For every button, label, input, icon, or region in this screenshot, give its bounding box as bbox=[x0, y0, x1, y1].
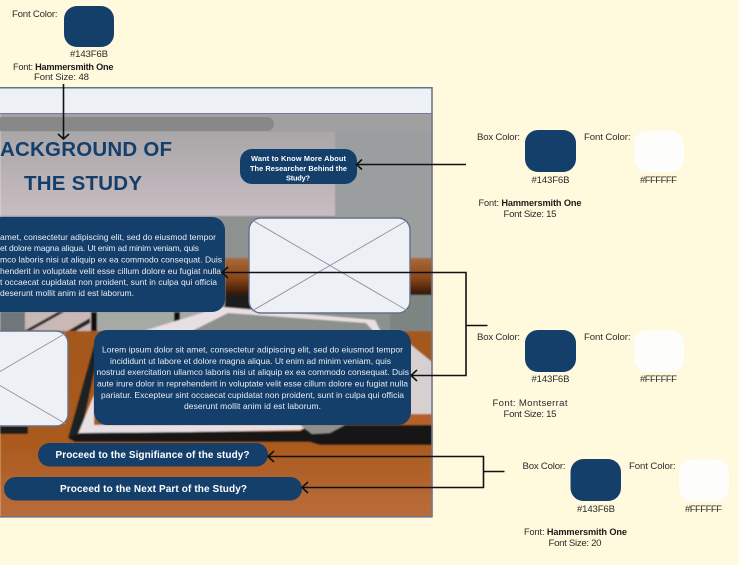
button: researcher bbox=[240, 149, 357, 184]
panel: page mockup bbox=[0, 88, 432, 517]
spec: proceed buttons: Font: Hammersmith One bbox=[524, 527, 627, 537]
spec: title font: #143F6B bbox=[70, 49, 108, 60]
browser top bar bbox=[0, 88, 432, 113]
title: THE STUDY bbox=[24, 172, 142, 195]
frame border bbox=[0, 88, 432, 517]
text box 2: deserunt mollit anim id est laborum. bbox=[184, 401, 321, 411]
swatch: box color bbox=[570, 459, 621, 501]
spec: body text boxes: #FFFFFF bbox=[640, 374, 677, 385]
spec: title font bbox=[12, 6, 114, 83]
spec: researcher button: Font: Hammersmith One bbox=[478, 198, 582, 208]
text box 1: mco laboris nisi ut aliquip ex ea commodo consequat. Duis bbox=[0, 254, 222, 264]
text box 1: et dolore magna aliqua. Ut enim ad minim veniam, quis bbox=[0, 243, 199, 253]
spec: researcher button: Box Color: bbox=[477, 132, 520, 143]
address bar bbox=[0, 117, 274, 131]
spec: proceed buttons: #FFFFFF bbox=[685, 504, 722, 515]
spec: title font: Font Size: 48 bbox=[34, 72, 89, 83]
background photo of desk bbox=[0, 113, 432, 517]
text box 1 bbox=[0, 217, 225, 312]
spec: researcher button: Font Color: bbox=[584, 132, 630, 143]
spec: proceed buttons: Font Size: 20 bbox=[548, 538, 602, 549]
spec: researcher button: #FFFFFF bbox=[640, 175, 677, 186]
spec: researcher button bbox=[477, 130, 684, 220]
spec: title font: Font: Hammersmith One bbox=[13, 62, 114, 72]
text box 1: t occaecat cupidatat non proident, sunt in culpa qui officia bbox=[0, 277, 217, 287]
spec: body text boxes: Font Color: bbox=[584, 332, 630, 343]
title: ACKGROUND OF bbox=[0, 138, 172, 161]
text box 2: aute irure dolor in reprehenderit in voluptate velit esse cillum dolore eu fugiat nulla bbox=[97, 378, 408, 388]
spec: body text boxes: Font Size: 15 bbox=[504, 409, 556, 420]
text box 1: deserunt mollit anim id est laborum. bbox=[0, 288, 134, 298]
text box 2 bbox=[94, 330, 411, 425]
spec: title font: Font Color: bbox=[12, 9, 58, 20]
text box 1: amet, consectetur adipiscing elit, sed do eiusmod tempor bbox=[0, 232, 216, 242]
text box 2: nostrud exercitation ullamco laboris nisi ut aliquip ex ea commodo consequat. Duis bbox=[96, 367, 409, 377]
button: researcher: The Researcher Behind the bbox=[250, 164, 347, 173]
spec: proceed buttons: Font Color: bbox=[629, 461, 676, 472]
spec: researcher button: #143F6B bbox=[532, 175, 570, 186]
spec: researcher button: Font Size: 15 bbox=[504, 209, 556, 220]
arrow bracket: text boxes annotation bbox=[222, 267, 488, 381]
image placeholder 1 bbox=[249, 218, 410, 313]
swatch: box color bbox=[525, 330, 576, 372]
image placeholder 2 bbox=[0, 331, 68, 426]
title bbox=[0, 138, 172, 195]
spec: proceed buttons: #143F6B bbox=[577, 504, 615, 515]
button: next part bbox=[4, 477, 302, 500]
button: researcher: Want to Know More About bbox=[251, 154, 347, 163]
arrow: researcher button annotation bbox=[356, 160, 466, 170]
spec: body text boxes: Box Color: bbox=[477, 332, 520, 343]
spec: proceed buttons: Box Color: bbox=[522, 461, 566, 472]
text box 2: pariatur. Excepteur sint occaecat cupidatat non proident, sunt in culpa qui officia bbox=[101, 390, 404, 400]
spec: body text boxes bbox=[477, 330, 684, 420]
button: next part: Proceed to the Next Part of the Study? bbox=[60, 484, 247, 495]
arrow: title annotation bbox=[58, 84, 69, 139]
swatch: title font color bbox=[64, 6, 114, 47]
button: significance: Proceed to the Signifiance of the study? bbox=[56, 450, 250, 461]
text box 2: Lorem ipsum dolor sit amet, consectetur adipiscing elit, sed do eiusmod tempor bbox=[102, 344, 403, 354]
swatch: box color bbox=[525, 130, 576, 172]
text box 1: henderit in voluptate velit esse cillum dolore eu fugiat nulla bbox=[0, 266, 221, 276]
text box 2: incididunt ut labore et dolore magna aliqua. Ut enim ad minim veniam, quis bbox=[110, 356, 391, 366]
button: significance bbox=[38, 443, 268, 466]
spec: body text boxes: Font: Montserrat bbox=[492, 398, 568, 409]
arrow bracket: buttons annotation bbox=[268, 451, 504, 493]
spec: proceed buttons bbox=[522, 459, 729, 549]
spec: body text boxes: #143F6B bbox=[532, 374, 570, 385]
button: researcher: Study? bbox=[286, 174, 310, 182]
